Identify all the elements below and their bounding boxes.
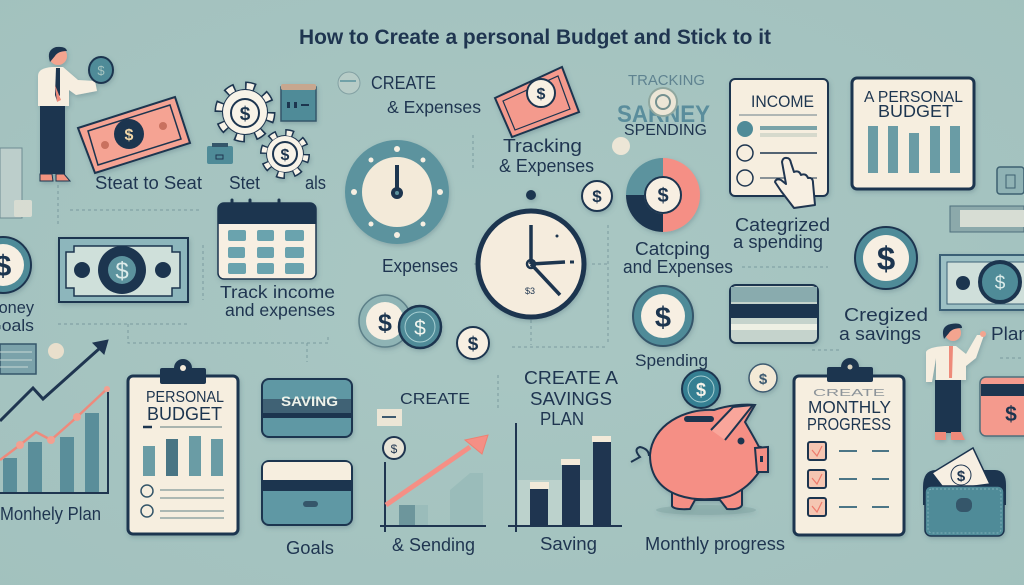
icon: payment card right (980, 377, 1024, 436)
label: Expenses: Expenses (382, 256, 458, 276)
label: Saving: Saving (540, 534, 597, 554)
icon: saving card: SAVING (281, 393, 338, 409)
income document (730, 79, 828, 196)
label: Tracking Sarney Spending: SPENDING (624, 122, 707, 139)
panel: monthly progress clipboard: CREATE (813, 388, 886, 399)
icon: central clock: $3 (525, 286, 535, 296)
icon: small token (649, 88, 677, 116)
icon: glass panel left (0, 148, 32, 218)
icon: small cream token (612, 137, 630, 155)
icon: piggy bank (631, 405, 768, 515)
icon: box right (997, 167, 1024, 194)
person presenting coin: $ (97, 63, 105, 78)
panel: monthly progress clipboard: PROGRESS (807, 414, 891, 434)
label: Steat to Seat: Steat to Seat (95, 173, 202, 193)
icon: pointing hand cursor (775, 158, 815, 208)
line and bar chart: monthly plan (0, 340, 110, 493)
label: Stet goals: als (305, 173, 326, 193)
label: Track income and expenses: Track income (220, 282, 335, 302)
label: Stet goals (229, 173, 326, 193)
icon: pink banknote: $ (125, 127, 134, 144)
label: Catcping and Expenses: Catcping (635, 239, 710, 259)
icon: small coin with chart: $ (391, 442, 398, 456)
label: Categrized a spending: a spending (733, 232, 823, 252)
label: & Sending: & Sending (392, 535, 475, 555)
icon: wallet with bill: $ (957, 468, 966, 485)
label: Track income and expenses (220, 282, 335, 320)
label: faint Create: CREATE (400, 391, 470, 408)
icon: ringed dollar coin right: $ (877, 240, 895, 277)
rising arrow chart (380, 435, 488, 532)
icon: overlapping coins (359, 295, 441, 348)
label: Catcping and Expenses (623, 239, 733, 277)
panel: monthly progress clipboard: MONTHLY (808, 397, 891, 417)
icon: small gear with dollar (264, 133, 306, 175)
icon: pink banknote with coin: $ (537, 86, 546, 103)
label: Tracking & Expenses: Tracking (503, 136, 582, 156)
icon: saving card (262, 379, 352, 437)
icon: window panel (281, 84, 316, 121)
panel: personal budget clipboard: BUDGET (147, 403, 222, 424)
icon: dollar coin small (457, 327, 489, 359)
donut chart: $ (657, 185, 669, 207)
label: Create a savings plan (524, 368, 618, 429)
icon: blue banknote left: $ (115, 258, 129, 285)
icon: ringed dollar coin center (633, 286, 693, 346)
label: Tracking Sarney Spending: SARNEY (617, 101, 710, 128)
icon: overlapping coins: $ (414, 317, 426, 340)
icon: wallet with bill (923, 448, 1006, 536)
icon: small gear with dollar: $ (281, 147, 290, 164)
icon: pink banknote with coin (495, 67, 579, 137)
label: Categrized a spending: Categrized (735, 215, 830, 235)
icon: central clock (478, 190, 584, 317)
person presenting coin (38, 47, 113, 181)
label: Stet goals: Stet (229, 173, 260, 193)
icon: small note center (377, 409, 402, 426)
label: CREATE & Expenses (371, 73, 481, 117)
icon: coin entering piggy bank: $ (696, 380, 706, 400)
icon: pink banknote (78, 97, 190, 173)
label: Goals: Goals (286, 538, 334, 558)
panel: a personal budget chart: BUDGET (878, 101, 953, 121)
panel: monthly progress clipboard (794, 358, 904, 535)
icon: blue banknote left (59, 238, 188, 302)
icon: faint tag (338, 72, 360, 94)
icon: blue banknote right (940, 255, 1024, 310)
icon: blue banknote right: $ (995, 273, 1006, 294)
label: Categrized a spending (733, 215, 830, 252)
label: Tracking Sarney Spending (617, 72, 710, 139)
icon: small coin (749, 364, 777, 392)
icon: payment card right: $ (1005, 403, 1017, 426)
icon: dollar coin small: $ (468, 334, 479, 355)
icon: small token left (48, 343, 64, 359)
icon: ringed dollar coin center: $ (655, 302, 671, 334)
icon: small coin with chart (383, 437, 405, 459)
income document: INCOME (751, 93, 814, 111)
icon: dollar coin (582, 181, 612, 211)
label: Create a savings plan: CREATE A (524, 368, 618, 388)
label: CREATE & Expenses: & Expenses (387, 97, 481, 117)
label: Spending: Spending (635, 351, 708, 370)
label: Tracking & Expenses (499, 136, 594, 176)
label: Create a savings plan: PLAN (540, 409, 584, 429)
icon: striped card center (730, 285, 818, 343)
label: Monhely Plan: Monhely Plan (0, 504, 101, 524)
label: Tracking Sarney Spending: TRACKING (628, 72, 705, 89)
person pointing (926, 324, 986, 440)
icon: small coin: $ (759, 371, 768, 388)
label: Monthly progress: Monthly progress (645, 533, 785, 554)
panel: a personal budget chart: A PERSONAL (864, 89, 963, 106)
label: Track income and expenses: and expenses (225, 300, 335, 320)
icon: teal dial clock (345, 140, 449, 244)
label: Money Goals (0, 298, 34, 335)
label: Cregized a savings: Cregized (844, 305, 928, 325)
label: Cregized a savings (839, 305, 928, 344)
icon: large gear with dollar: $ (240, 104, 251, 125)
icon: ringed dollar coin right (855, 227, 917, 289)
icon: large gear with dollar (219, 86, 271, 138)
icon: calendar (218, 200, 316, 279)
panel: a personal budget chart (852, 78, 974, 189)
icon: small strip at right (950, 206, 1024, 232)
bar chart: saving (508, 423, 622, 532)
label: Cregized a savings: a savings (839, 324, 921, 344)
icon: coin entering piggy bank (682, 370, 720, 408)
label: Create a savings plan: SAVINGS (530, 389, 612, 409)
icon: overlapping coins: $ (378, 309, 392, 337)
icon: dollar coin: $ (592, 187, 602, 206)
title: How to Create a personal Budget and Stick to it (299, 26, 771, 49)
label: CREATE & Expenses: CREATE (371, 73, 436, 93)
icon: small case (207, 143, 233, 164)
label: Catcping and Expenses: and Expenses (623, 257, 733, 277)
icon: goals card (262, 461, 352, 525)
panel: personal budget clipboard (128, 359, 238, 534)
donut chart (626, 158, 700, 232)
icon: small note left (0, 344, 36, 374)
label: Tracking & Expenses: & Expenses (499, 156, 594, 176)
panel: personal budget clipboard: PERSONAL (146, 389, 224, 406)
icon: ringed coin left (0, 237, 31, 293)
